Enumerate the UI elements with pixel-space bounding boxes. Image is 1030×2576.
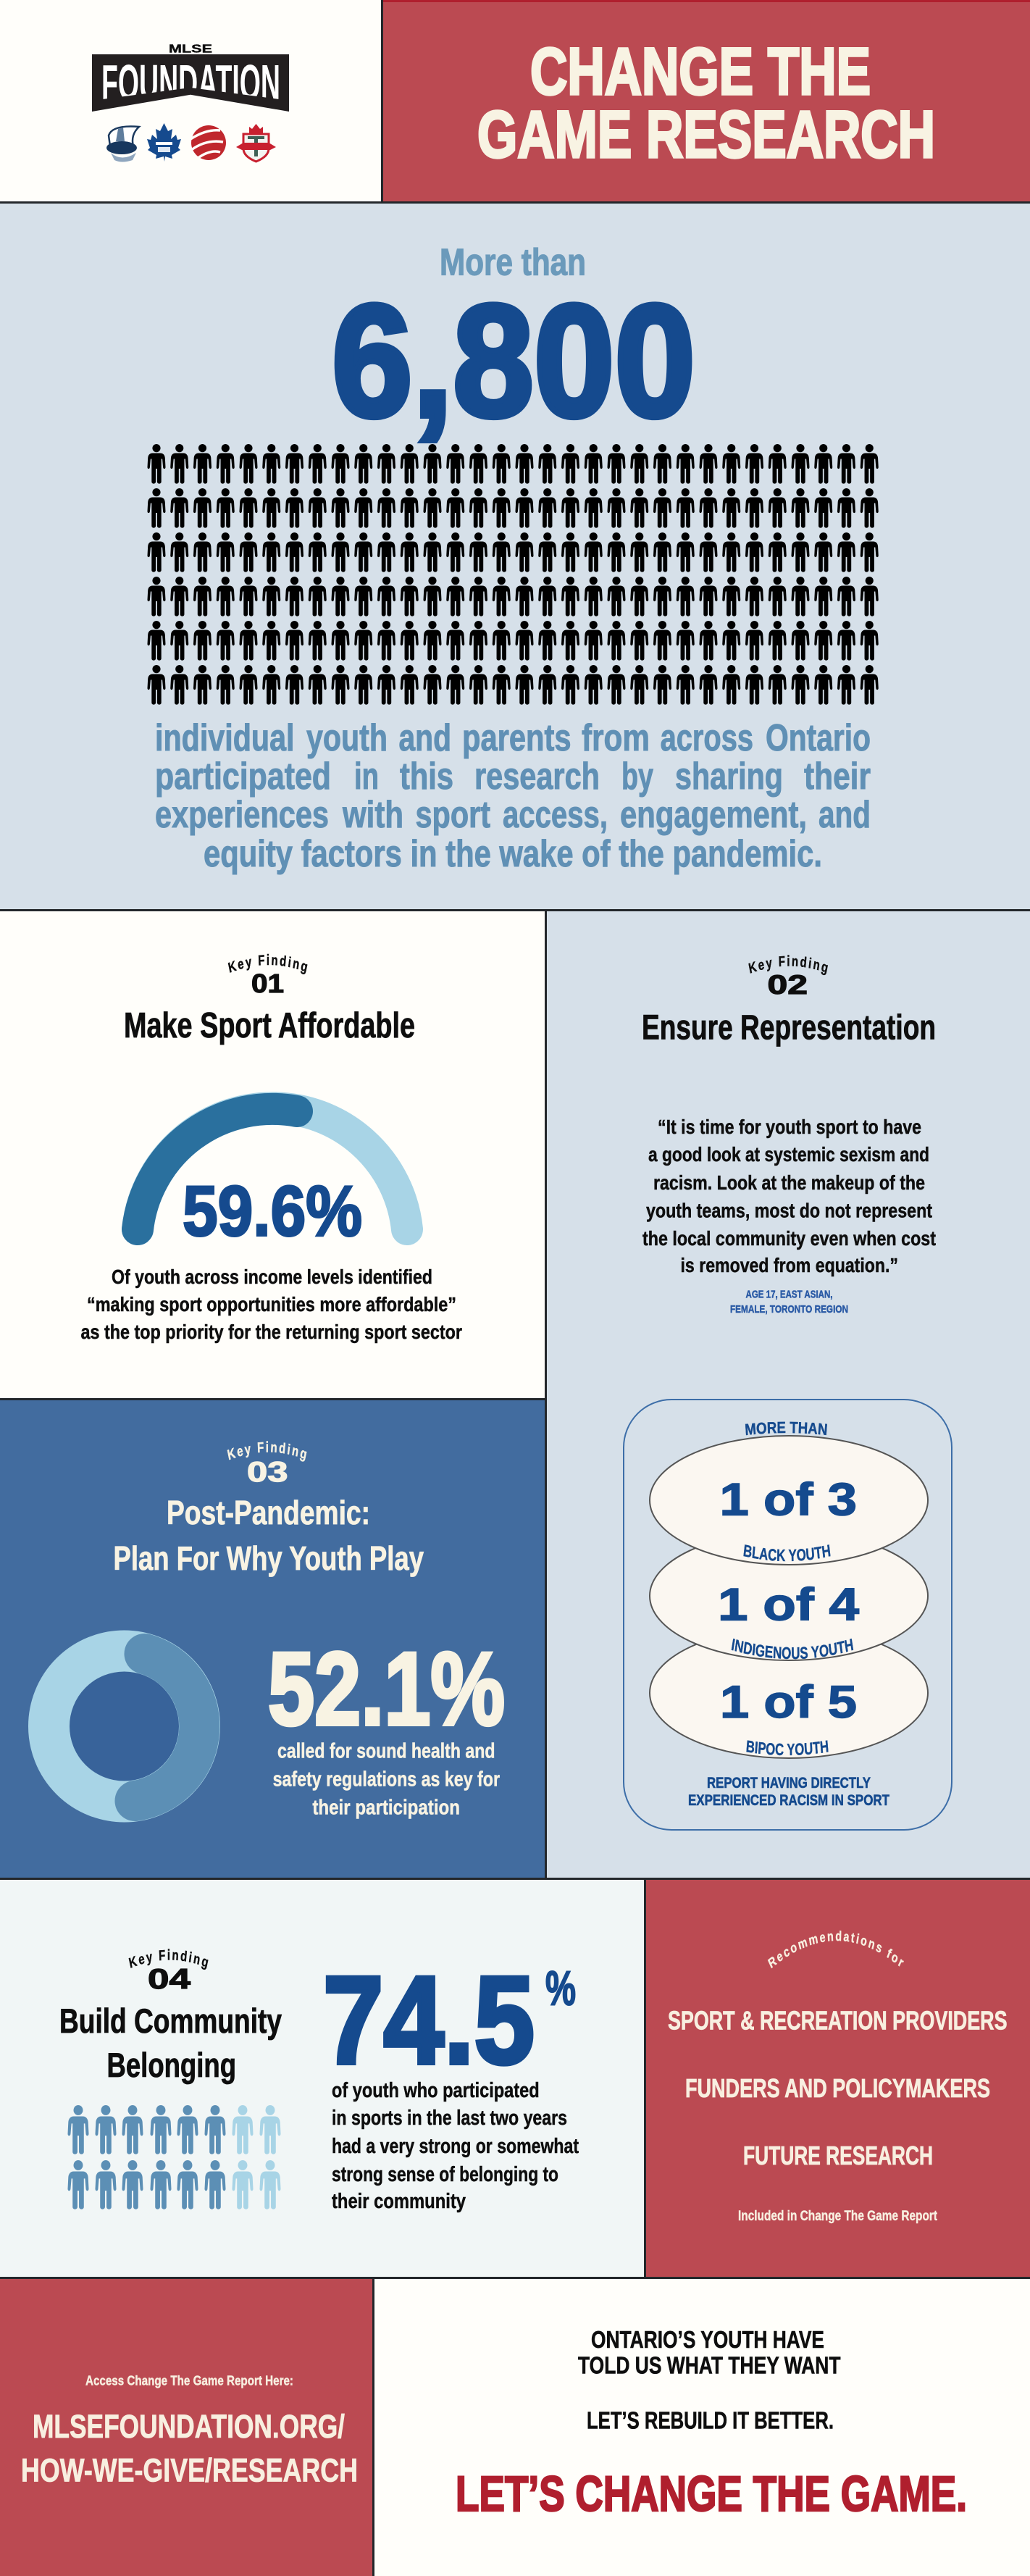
hero description text: and bbox=[818, 794, 871, 836]
description text: in sports in the last two years bbox=[332, 2107, 567, 2130]
hero description text: sharing bbox=[675, 756, 783, 798]
quote text: “It is time for youth sport to have bbox=[658, 1116, 921, 1138]
quote text: youth teams, most do not represent bbox=[646, 1200, 932, 1221]
icon: Argonauts logo bbox=[106, 126, 139, 162]
donut chart: 52.1% bbox=[49, 1651, 200, 1802]
report URL: MLSEFOUNDATION.ORG/ bbox=[33, 2408, 345, 2445]
title line 1: CHANGE THE bbox=[530, 35, 871, 109]
panel: title bbox=[383, 0, 1030, 201]
report URL bbox=[21, 2408, 358, 2489]
description text bbox=[81, 1266, 462, 1343]
description text: safety regulations as key for bbox=[273, 1768, 500, 1791]
description text: called for sound health and bbox=[277, 1740, 495, 1763]
panel: key finding 03 bbox=[0, 1400, 545, 1878]
curved label: key finding 02: Key Finding bbox=[748, 955, 829, 975]
hero description text: by bbox=[621, 756, 653, 798]
oval: 1 of 5 bipoc youth: BIPOC YOUTH bbox=[746, 1740, 829, 1756]
curved label: recommendations for: Recommendations for bbox=[768, 1931, 904, 1969]
quote text: is removed from equation.” bbox=[681, 1254, 898, 1276]
logo wordmark: FOUNDATION: FOUNDATION bbox=[101, 54, 280, 111]
stat: 59.6%: 59.6% bbox=[183, 1171, 362, 1250]
hero description text: and bbox=[398, 717, 451, 759]
oval: 1 of 4 indigenous youth: INDIGENOUS YOUTH bbox=[732, 1639, 853, 1659]
heading: build community belonging: Belonging bbox=[107, 2046, 236, 2084]
heading: post-pandemic: Post-Pandemic: bbox=[167, 1494, 370, 1531]
panel: participants hero bbox=[0, 204, 1030, 909]
hero description text: youth bbox=[306, 717, 388, 759]
heading: ensure representation: Ensure Representation bbox=[642, 1008, 936, 1047]
description text: their community bbox=[332, 2190, 466, 2213]
callout: racism statistics bbox=[623, 1399, 952, 1831]
heading: post-pandemic: Plan For Why Youth Play bbox=[113, 1539, 424, 1577]
closing statement: TOLD US WHAT THEY WANT bbox=[578, 2352, 840, 2379]
panel: key finding 01 bbox=[0, 911, 545, 1398]
panel: report link bbox=[0, 2279, 372, 2576]
oval: 1 of 3 black youth bbox=[649, 1435, 929, 1565]
quote text: racism. Look at the makeup of the bbox=[653, 1171, 925, 1194]
heading: make sport affordable: Make Sport Affordable bbox=[124, 1006, 415, 1045]
hero description text: sport bbox=[416, 794, 490, 836]
link label: Access Change The Game Report Here: bbox=[85, 2374, 293, 2388]
icon: Maple Leafs logo bbox=[147, 123, 181, 162]
panel: key finding 02 bbox=[547, 911, 1030, 1878]
curved label: more than: MORE THAN bbox=[745, 1421, 827, 1436]
hero description text: engagement, bbox=[620, 794, 807, 836]
curved label: key finding 04: Key Finding bbox=[129, 1949, 209, 1970]
hero description text: Ontario bbox=[766, 717, 871, 759]
oval: 1 of 3 black youth: BLACK YOUTH bbox=[743, 1544, 831, 1562]
heading: build community belonging: Build Community bbox=[59, 2002, 282, 2040]
finding number 02: 02 bbox=[768, 970, 808, 1000]
oval: 1 of 4 indigenous youth: 1 of 4 bbox=[718, 1579, 859, 1630]
hero description text bbox=[155, 717, 871, 875]
callout caption: REPORT HAVING DIRECTLY bbox=[707, 1775, 871, 1791]
heading: post-pandemic bbox=[113, 1494, 424, 1577]
hero description text: in bbox=[354, 756, 379, 798]
closing statement: LET’S REBUILD IT BETTER. bbox=[587, 2407, 834, 2434]
hero description text: equity factors in the wake of the pandemic. bbox=[204, 833, 822, 875]
closing statement: ONTARIO’S YOUTH HAVE bbox=[591, 2326, 824, 2353]
hero description text: parents bbox=[462, 717, 571, 759]
hero description text: individual bbox=[155, 717, 294, 759]
logo banner bbox=[92, 54, 289, 112]
finding number 04: 04 bbox=[148, 1964, 190, 1995]
curved label: key finding 03: Key Finding bbox=[227, 1441, 307, 1462]
hero description text: this bbox=[400, 756, 453, 798]
hero description text: from bbox=[582, 717, 650, 759]
hero description text: research bbox=[474, 756, 600, 798]
icon: Toronto FC logo bbox=[236, 124, 276, 162]
callout caption bbox=[688, 1775, 889, 1809]
logo wordmark: MLSE: MLSE bbox=[169, 43, 212, 55]
finding number 01: 01 bbox=[251, 969, 284, 998]
pictogram: 16 people, 12 highlighted bbox=[68, 2105, 281, 2209]
quote attribution: FEMALE, TORONTO REGION bbox=[730, 1303, 848, 1316]
description text: Of youth across income levels identified bbox=[112, 1266, 432, 1288]
pictogram: grid of people bbox=[148, 444, 879, 705]
stat: 74.5%: 74.5 bbox=[323, 1951, 535, 2090]
oval: 1 of 4 indigenous youth bbox=[649, 1548, 929, 1661]
panel: recommendations bbox=[646, 1880, 1030, 2277]
panel: logo bbox=[0, 0, 381, 201]
lead-in text: More than bbox=[440, 242, 586, 284]
quote text: a good look at systemic sexism and bbox=[648, 1143, 929, 1166]
oval: 1 of 3 black youth: 1 of 3 bbox=[720, 1475, 857, 1526]
description text: of youth who participated bbox=[332, 2079, 540, 2102]
stat: 52.1%: 52.1% bbox=[268, 1631, 505, 1747]
description text bbox=[273, 1740, 500, 1820]
curved label: key finding 01: Key Finding bbox=[227, 953, 307, 974]
description text: had a very strong or somewhat bbox=[332, 2135, 579, 2158]
description text: their participation bbox=[312, 1797, 460, 1820]
description text: as the top priority for the returning sport sector bbox=[81, 1321, 462, 1343]
hero description text: experiences bbox=[155, 794, 329, 836]
hero description text: across bbox=[661, 717, 753, 759]
hero description text: their bbox=[804, 756, 871, 798]
closing statement bbox=[578, 2326, 840, 2434]
quote text: the local community even when cost bbox=[642, 1227, 936, 1250]
finding number 03: 03 bbox=[247, 1457, 288, 1488]
quote text bbox=[642, 1116, 936, 1276]
heading: build community belonging bbox=[59, 2002, 282, 2084]
hero description text: access, bbox=[503, 794, 608, 836]
oval: 1 of 5 bipoc youth: 1 of 5 bbox=[720, 1677, 857, 1728]
panel: key finding 04 bbox=[0, 1880, 644, 2277]
oval: 1 of 5 bipoc youth bbox=[649, 1644, 929, 1759]
hero description text: participated bbox=[155, 756, 331, 798]
recommendation list bbox=[668, 2005, 1007, 2170]
description text: strong sense of belonging to bbox=[332, 2163, 558, 2186]
note: Included in Change The Game Report bbox=[738, 2209, 938, 2224]
hero description text: with bbox=[342, 794, 403, 836]
icon: Raptors logo bbox=[190, 125, 226, 160]
gauge chart: 59.6% bbox=[138, 1108, 407, 1229]
callout caption: EXPERIENCED RACISM IN SPORT bbox=[688, 1792, 889, 1809]
recommendation list: FUTURE RESEARCH bbox=[743, 2141, 933, 2170]
quote attribution: AGE 17, EAST ASIAN, bbox=[746, 1288, 833, 1301]
panel: closing message bbox=[374, 2279, 1030, 2576]
quote attribution bbox=[730, 1288, 848, 1316]
description text: “making sport opportunities more affordable” bbox=[87, 1293, 456, 1316]
report URL: HOW-WE-GIVE/RESEARCH bbox=[21, 2452, 358, 2489]
big number: 6,800 bbox=[332, 272, 695, 450]
stat: 74.5%: % bbox=[545, 1962, 576, 2015]
description text bbox=[332, 2079, 579, 2213]
